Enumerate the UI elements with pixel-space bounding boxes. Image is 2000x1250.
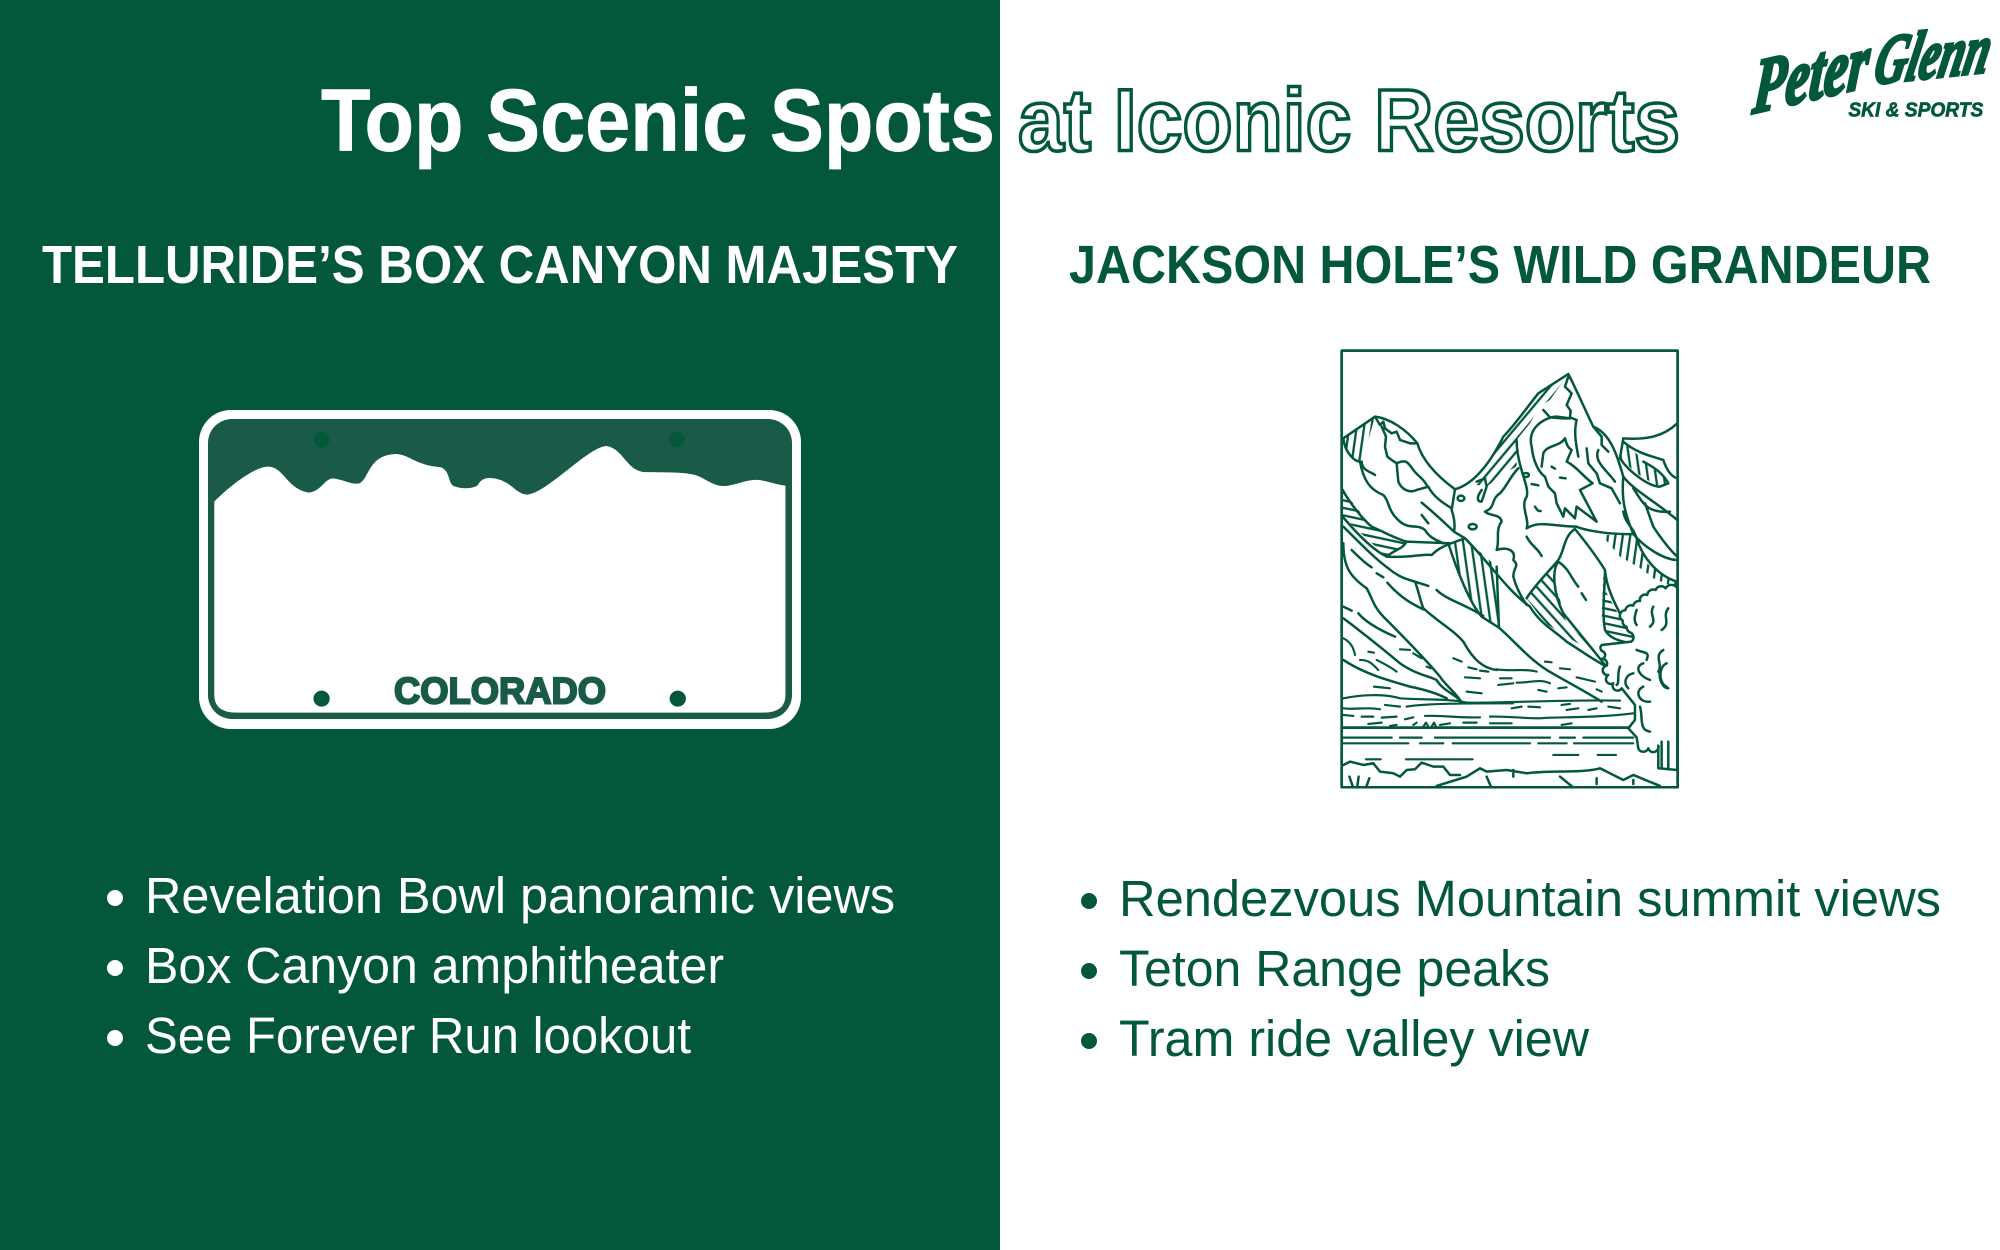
logo: Peter Glenn Ski & Sports: Peter: [1749, 16, 1874, 131]
title: Top Scenic Spots: [321, 70, 995, 170]
title: [321, 70, 1680, 170]
icon: Teton mountain line illustration: [1342, 351, 1678, 787]
title: at Iconic Resorts: [1018, 70, 1680, 170]
bullet list: Jackson Hole: Tram ride valley view: [1119, 1010, 1589, 1067]
bullet list: Jackson Hole: [1081, 870, 1941, 1067]
heading: Telluride: TELLURIDE’S BOX CANYON MAJESTY: [42, 235, 958, 295]
logo: Peter Glenn Ski & Sports: [1749, 11, 1999, 131]
icon: Colorado license plate: COLORADO: [394, 670, 606, 712]
bullet list: Telluride: Revelation Bowl panoramic views: [145, 867, 895, 924]
bullet list: Telluride: Box Canyon amphitheater: [145, 937, 724, 994]
bullet list: Telluride: See Forever Run lookout: [145, 1007, 691, 1064]
bullet list: Jackson Hole: Teton Range peaks: [1119, 940, 1550, 997]
logo: Peter Glenn Ski & Sports: SKI & SPORTS: [1848, 100, 1984, 122]
panel: green left background: [0, 0, 1000, 1250]
bullet list: Telluride: [107, 867, 895, 1064]
bullet list: Jackson Hole: Rendezvous Mountain summit views: [1119, 870, 1941, 927]
icon: Colorado license plate: [199, 410, 801, 729]
